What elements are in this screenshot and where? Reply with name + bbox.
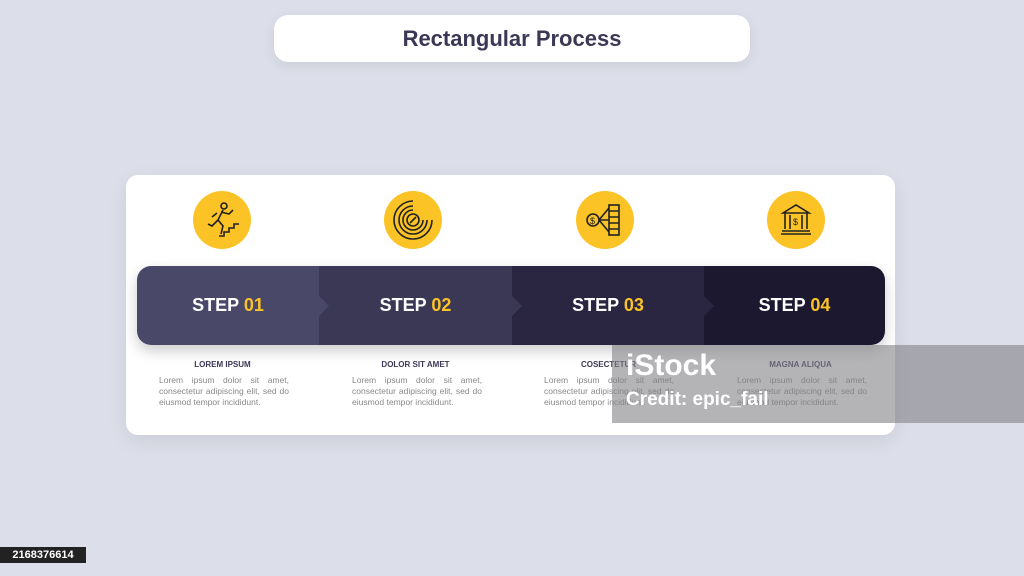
id label <box>0 547 86 563</box>
text: Lorem ipsum dolor sit amet, consectetur adipiscing elit, sed do eiusmod tempor incididunt. <box>544 375 674 407</box>
step band <box>137 266 885 345</box>
icon: coin servers <box>576 191 634 249</box>
text: Lorem ipsum dolor sit amet, consectetur adipiscing elit, sed do eiusmod tempor incididunt. <box>737 375 867 407</box>
step band: STEP 03 <box>572 295 644 315</box>
icon: percent radar <box>384 191 442 249</box>
icon: coin servers: $ <box>590 216 595 226</box>
title <box>274 15 750 62</box>
watermark <box>612 345 1024 423</box>
step band: STEP 04 <box>759 295 830 315</box>
icon: bank: $ <box>793 217 798 227</box>
watermark: Credit: epic_fail <box>626 389 769 410</box>
icon: bank <box>767 191 825 249</box>
text: DOLOR SIT AMET <box>381 360 450 369</box>
texts: LOREM IPSUM <box>194 360 251 369</box>
text: MAGNA ALIQUA <box>769 360 832 369</box>
icon: stairs <box>193 191 251 249</box>
id label: 2168376614 <box>12 549 74 561</box>
text: Lorem ipsum dolor sit amet, consectetur adipiscing elit, sed do eiusmod tempor incididunt. <box>352 375 482 407</box>
panel: process card <box>126 175 895 435</box>
text: COSECTETUR <box>581 360 636 369</box>
title: Rectangular Process <box>403 26 621 51</box>
step band: STEP 01 <box>192 295 264 315</box>
watermark: iStock <box>626 349 716 382</box>
text: Lorem ipsum dolor sit amet, consectetur adipiscing elit, sed do eiusmod tempor incididunt. <box>159 375 289 407</box>
step band: STEP 02 <box>380 295 451 315</box>
